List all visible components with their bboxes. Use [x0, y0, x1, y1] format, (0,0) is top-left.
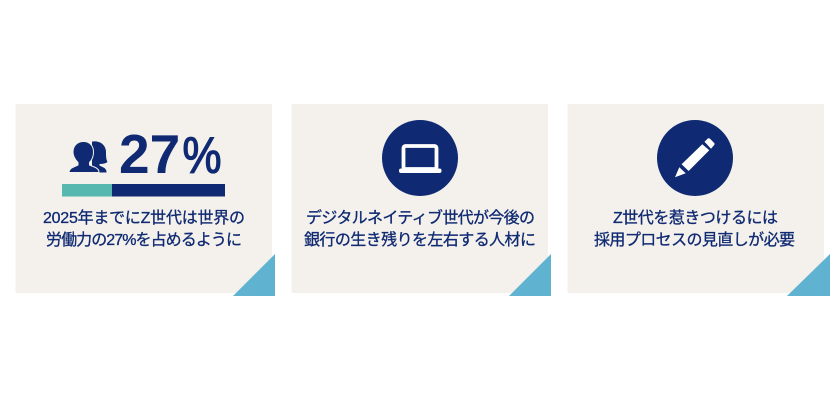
text: description: 採用プロセスの見直しが必要 — [594, 231, 795, 249]
stat: 27%: % — [182, 126, 222, 184]
pencil tip — [675, 167, 686, 177]
stat: 27% — [119, 123, 222, 185]
panel: recruiting — [568, 104, 830, 296]
corner triangle — [233, 254, 275, 296]
text: description: デジタルネイティブ世代が今後の — [306, 208, 535, 227]
panel background — [568, 104, 824, 293]
text: description: Z世代を惹きつけるには — [613, 209, 778, 227]
icon: pencil — [657, 120, 733, 196]
progress bar — [62, 184, 225, 196]
panel background — [292, 104, 548, 293]
text: description — [43, 209, 245, 249]
panel background — [16, 104, 272, 293]
bar segment: 27% teal — [62, 184, 112, 196]
corner triangle — [787, 254, 830, 296]
icon: laptop — [382, 120, 458, 196]
pencil eraser — [704, 138, 715, 149]
text: description: 2025年までにZ世代は世界の — [43, 209, 245, 227]
pencil body — [682, 144, 709, 171]
bar segment: remainder navy — [112, 184, 225, 196]
panel: digital native — [292, 104, 551, 296]
corner triangle — [509, 254, 551, 296]
stat: 27%: 27 — [119, 123, 180, 185]
icon: two people — [69, 141, 108, 172]
text: description — [594, 209, 795, 249]
text: description: 労働力の27%を占めるように — [46, 231, 242, 249]
text: description: 銀行の生き残りを左右する人材に — [304, 231, 536, 249]
panel: 27% of workforce — [16, 104, 275, 296]
text: description — [304, 208, 536, 249]
